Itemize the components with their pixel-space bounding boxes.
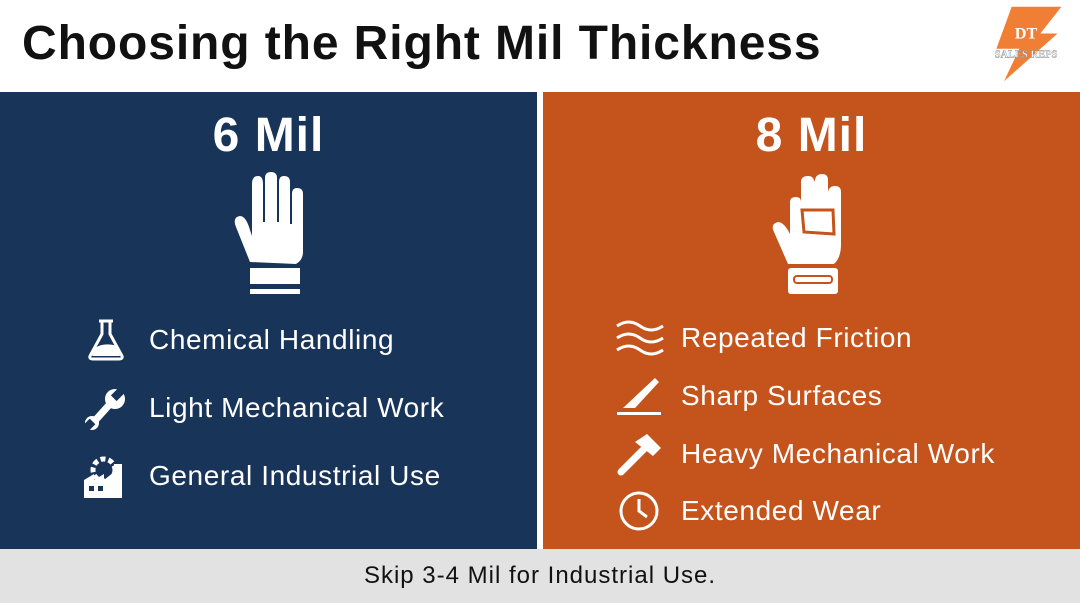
logo: DT <box>1015 24 1037 42</box>
item: general industrial <box>84 456 441 498</box>
icon: heavy glove <box>772 174 841 294</box>
heading: 8 Mil: 8 Mil <box>756 109 867 162</box>
logo: SALES REPS <box>995 49 1058 60</box>
item: repeated friction: Repeated Friction <box>681 322 912 353</box>
item: general industrial: General Industrial Use <box>149 460 441 491</box>
item: extended wear: Extended Wear <box>681 495 881 526</box>
icon: glove <box>234 172 303 294</box>
item: repeated friction <box>616 320 912 356</box>
item: sharp surfaces: Sharp Surfaces <box>681 380 882 411</box>
item: light mechanical: Light Mechanical Work <box>149 392 444 423</box>
item: chemical handling <box>88 320 394 360</box>
item: chemical handling: Chemical Handling <box>149 324 394 355</box>
item: extended wear <box>620 492 881 530</box>
title: Choosing the Right Mil Thickness <box>22 17 822 70</box>
item: heavy mechanical: Heavy Mechanical Work <box>681 438 995 469</box>
heading: 6 Mil: 6 Mil <box>213 109 324 162</box>
item: light mechanical <box>85 389 444 430</box>
panel: 8 mil <box>543 92 1080 549</box>
panel: 6 mil <box>0 92 537 549</box>
logo <box>995 6 1062 82</box>
item: heavy mechanical <box>618 434 995 476</box>
footer: Skip 3-4 Mil for Industrial Use. <box>364 562 716 589</box>
footer <box>0 549 1080 603</box>
item: sharp surfaces <box>617 378 882 415</box>
